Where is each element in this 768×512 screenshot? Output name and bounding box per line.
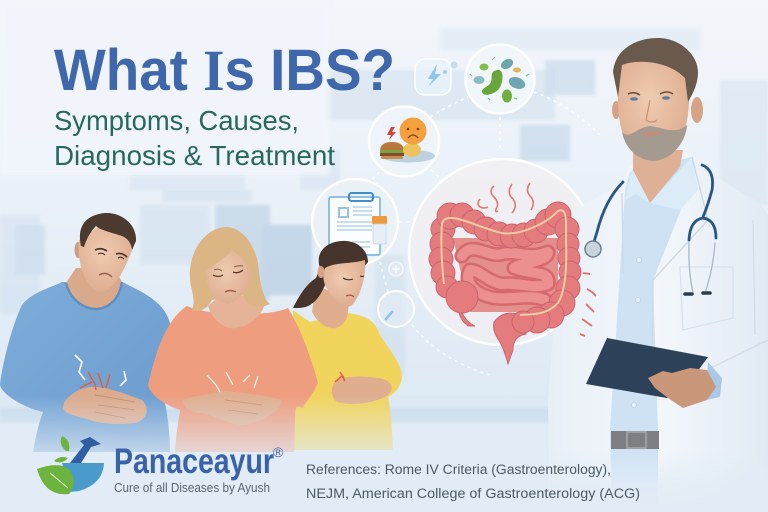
tagline: Cure of all Diseases by Ayush — [114, 481, 270, 495]
intestines illustration — [429, 183, 596, 364]
pain marks — [580, 273, 596, 336]
bottom mist — [0, 395, 560, 512]
doctor lower fade — [550, 450, 768, 512]
person: woman in coral top — [148, 227, 318, 452]
references: References: Rome IV Criteria (Gastroenterology), — [306, 462, 611, 477]
subtitle: Diagnosis & Treatment — [54, 140, 335, 171]
stethoscope — [585, 165, 716, 294]
icon: small circle pill — [378, 291, 414, 327]
hand — [648, 368, 716, 408]
icon: plus badge — [389, 262, 403, 276]
person: doctor — [548, 38, 768, 512]
small intestine — [462, 249, 548, 300]
clipboard — [586, 338, 708, 398]
subtitle: Symptoms, Causes, — [54, 105, 299, 136]
decoration: ground mist — [0, 452, 768, 512]
icon: gut bacteria circle — [466, 44, 534, 114]
icon: diagnosis clipboard circle — [312, 179, 398, 265]
logo — [37, 436, 284, 495]
dashed connectors — [370, 92, 600, 375]
icon: food trigger circle — [369, 106, 439, 176]
registered mark: ® — [273, 444, 284, 460]
small intestine base — [453, 238, 558, 312]
logo icon: mortar, pestle and leaf — [37, 436, 104, 494]
brand name: Panaceayur — [114, 442, 274, 481]
shirt cuff — [706, 362, 722, 400]
person: man in blue sweater — [0, 213, 170, 452]
large gut circle — [409, 159, 595, 345]
wavy gas lines — [478, 183, 533, 213]
person: woman in yellow top — [290, 241, 402, 450]
belt — [611, 431, 659, 449]
references: NEJM, American College of Gastroenterology (ACG) — [306, 486, 640, 501]
colon — [429, 202, 581, 364]
colon band — [441, 210, 566, 315]
title: What Is IBS? — [54, 38, 395, 103]
icon: lightning badge — [415, 59, 458, 95]
